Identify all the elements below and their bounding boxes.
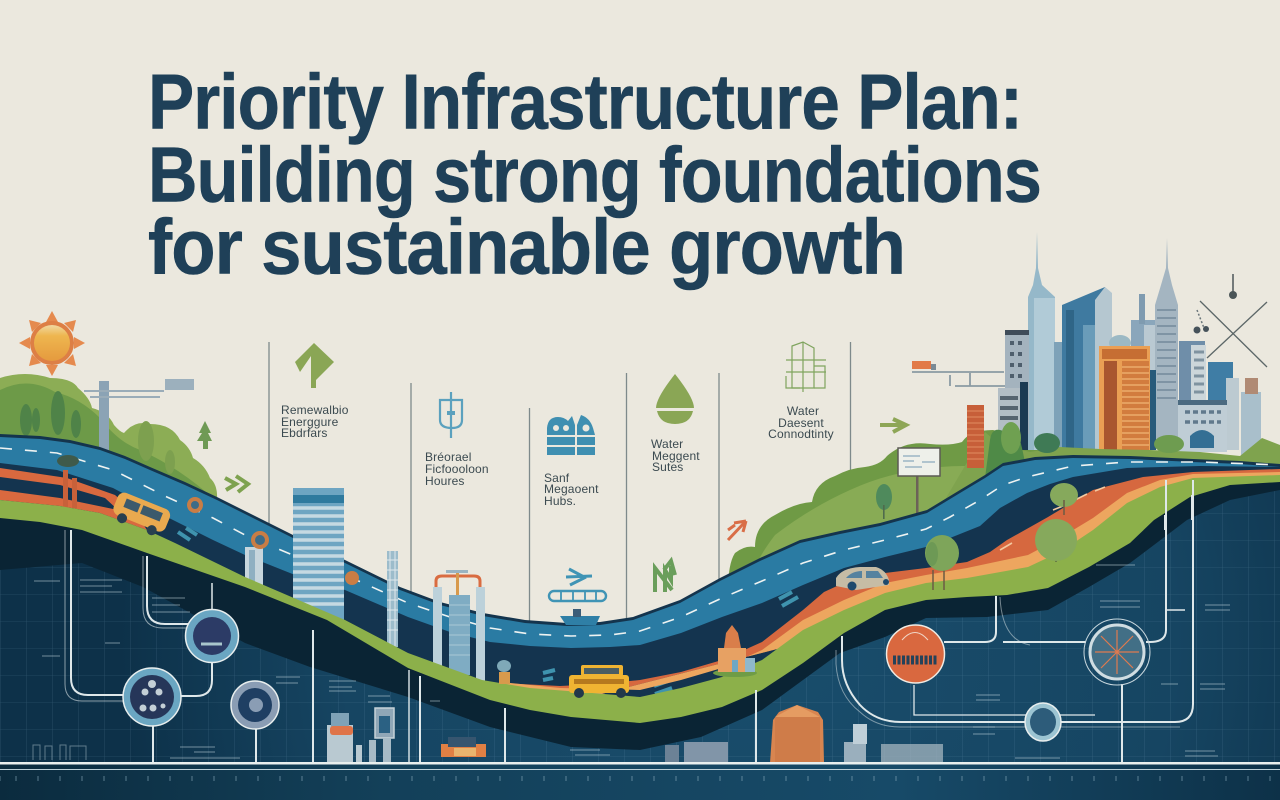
label: renewable: Energgure	[281, 415, 339, 429]
label: houses: Bréorael	[425, 450, 472, 464]
right hills	[728, 430, 1060, 620]
label: water: Sutes	[652, 460, 683, 474]
vertical dividers	[269, 342, 850, 622]
orange lanes left	[0, 468, 147, 530]
ground buildings right	[665, 705, 943, 763]
road: navy band	[0, 463, 1280, 800]
trees on road	[925, 483, 1078, 590]
skybridge with truck	[912, 361, 1005, 386]
road: centre dashes	[0, 448, 1280, 636]
boat on road	[560, 609, 600, 625]
icon: train and plane	[549, 569, 606, 601]
light dashes on orange	[1000, 487, 1105, 550]
utility pole	[84, 379, 194, 457]
small arrows	[197, 419, 906, 592]
under-ground shadow	[0, 482, 1280, 800]
label: hubs	[544, 471, 599, 508]
pipes right	[756, 480, 1193, 763]
label: houses	[425, 450, 489, 488]
label: renewable: Remewalbio	[281, 403, 349, 417]
icon: sun	[19, 311, 85, 376]
tower blue striped	[293, 488, 344, 623]
label: water: Meggent	[652, 449, 700, 463]
red building	[967, 405, 984, 468]
icon: vial	[440, 392, 462, 438]
label: connectivity: Daesent	[778, 416, 824, 430]
blueprint panel	[0, 490, 1280, 800]
label: hubs: Sanf	[544, 471, 570, 485]
title: for sustainable growth	[148, 202, 905, 290]
gantry tower	[433, 570, 485, 682]
label: connectivity: Connodtinty	[768, 427, 834, 441]
icon: up arrow renewable	[295, 343, 334, 388]
grey car	[836, 567, 889, 590]
label: water	[651, 437, 700, 474]
tower small left	[187, 497, 359, 587]
baseline rails	[0, 762, 1280, 781]
road: edge	[0, 434, 1280, 800]
label: water: Water	[651, 437, 683, 451]
blueprint grid	[0, 490, 1280, 765]
title: Building strong foundations	[148, 130, 1041, 218]
orange bridge	[57, 455, 79, 508]
blue lane marks	[178, 528, 798, 694]
circle node 1	[186, 610, 238, 662]
label: houses: Ficfoooloon	[425, 462, 489, 476]
title	[148, 58, 1041, 290]
icon: water drop	[656, 374, 694, 424]
label: renewable	[281, 403, 349, 440]
label: hubs: Megaoent	[544, 482, 599, 496]
label: connectivity	[768, 404, 834, 441]
label: hubs: Hubs.	[544, 494, 576, 508]
pipes left	[65, 530, 505, 763]
circle node orange	[886, 625, 944, 683]
city skyline	[998, 232, 1261, 456]
hanging cross and pendulum	[1194, 274, 1267, 367]
title: Priority Infrastructure Plan:	[148, 58, 1022, 146]
circle node 2	[123, 668, 181, 726]
label: houses: Houres	[425, 474, 465, 488]
car left	[109, 491, 172, 539]
castle tower	[713, 625, 757, 677]
label: connectivity: Water	[787, 404, 819, 418]
label: renewable: Ebdrfars	[281, 426, 328, 440]
icon: building plan	[786, 342, 826, 392]
green ground under skyline	[930, 422, 1280, 525]
yellow van	[569, 665, 629, 698]
yellow stripe	[500, 472, 1280, 720]
billboard	[898, 448, 940, 531]
green embankment	[0, 475, 1280, 800]
orange lane right	[500, 469, 1280, 720]
small node	[1025, 703, 1061, 741]
lattice tower	[387, 551, 398, 647]
road: blue lane	[0, 437, 1280, 800]
wheel node	[1084, 619, 1150, 685]
circle node 3	[231, 681, 279, 729]
icon: hub	[547, 415, 595, 455]
bottom strip	[0, 764, 1280, 800]
blueprint annotations	[33, 565, 1230, 760]
ground buildings left	[327, 708, 486, 763]
small figure icon	[497, 660, 511, 684]
left hills	[0, 374, 217, 510]
